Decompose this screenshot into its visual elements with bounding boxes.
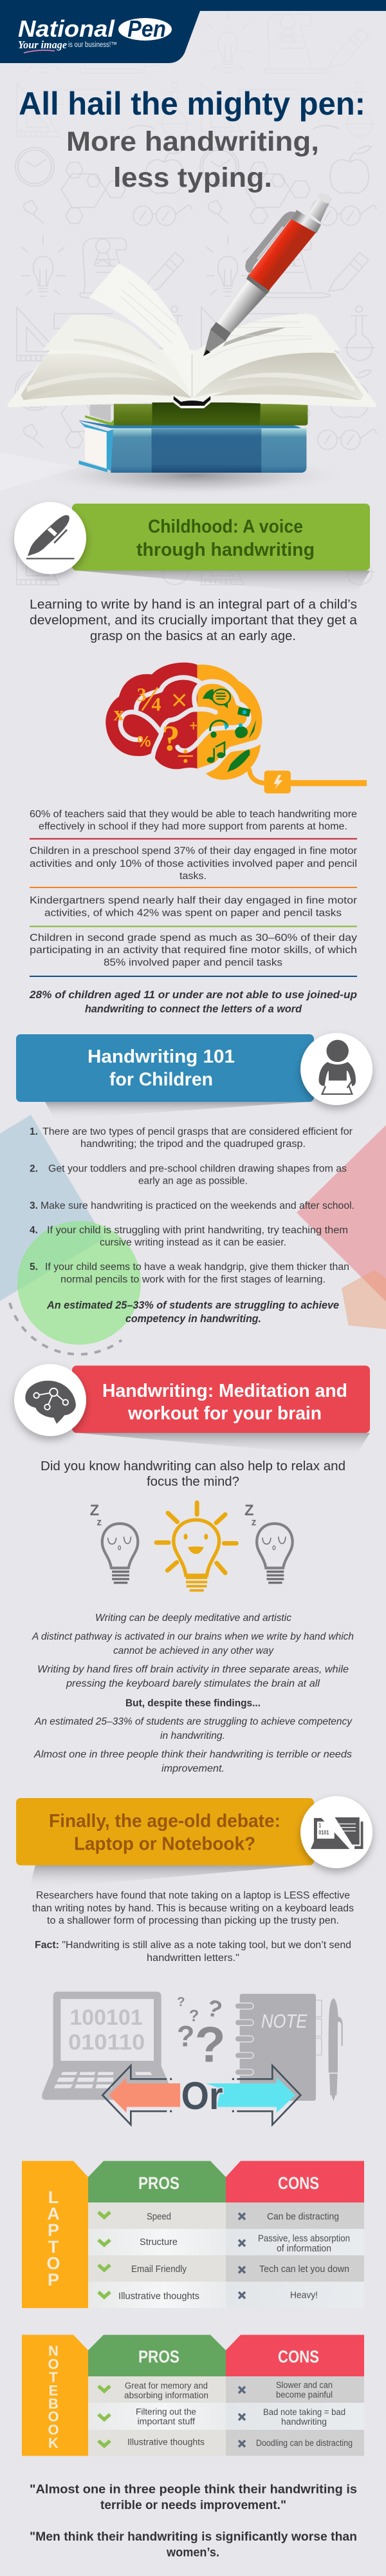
icon: sleeping bulb left — [90, 1502, 138, 1583]
meditation facts: cannot be achieved in any other way — [113, 1645, 274, 1656]
blue header bar — [16, 1034, 314, 1102]
green header bar — [72, 504, 370, 571]
icon: sleeping bulb right: Z — [244, 1502, 254, 1519]
meditation facts: An estimated 25–33% of students are struggling to achieve competency — [34, 1716, 353, 1727]
icon: sleeping bulb right: z — [252, 1517, 257, 1528]
tip 1: 1. — [30, 1126, 38, 1137]
estimate callout: An estimated 25–33% of students are struggling to achieve — [46, 1299, 339, 1311]
stat: second grade: Children in second grade spend as much as 30–60% of their day — [30, 933, 357, 943]
laptop label: P — [48, 2270, 59, 2289]
table rows: of information — [277, 2244, 331, 2254]
stat: second grade — [30, 933, 357, 969]
table rows: Speed — [147, 2211, 171, 2222]
cons header — [226, 2161, 364, 2202]
notebook label: O — [48, 2421, 59, 2438]
pros header — [88, 2335, 226, 2376]
tip 2: Get your toddlers and pre-school children drawing shapes from as — [48, 1163, 347, 1175]
meditation facts: Almost one in three people think their handwriting is terrible or needs — [33, 1749, 352, 1760]
tip 3: Make sure handwriting is practiced on the weekends and after school. — [41, 1200, 354, 1211]
meditation facts: Writing can be deeply meditative and artistic — [95, 1613, 291, 1624]
stat: kindergartners: Kindergartners spend nearly half their day engaged in fine motor — [30, 895, 357, 906]
laptop label — [22, 2161, 88, 2308]
icon: child writing — [300, 1033, 372, 1105]
illustration: pen — [203, 191, 333, 356]
pen — [329, 1998, 343, 2101]
heading: Childhood: A voice — [148, 516, 303, 537]
title: less typing. — [113, 162, 272, 193]
stat: kindergartners — [30, 895, 357, 918]
title — [19, 86, 365, 193]
panel: Handwriting 101 — [16, 1033, 372, 1119]
notebook: NOTE — [261, 2011, 308, 2032]
notebook label: K — [48, 2435, 59, 2451]
tip 2 — [30, 1163, 347, 1186]
cons header — [226, 2335, 364, 2376]
illustration: light bulbs — [90, 1502, 293, 1591]
tip 2: early an age as possible. — [138, 1176, 248, 1186]
closing quotes: "Men think their handwriting is significantly worse than — [30, 2530, 357, 2544]
heading: workout for your brain — [127, 1403, 322, 1424]
heading — [49, 1811, 280, 1855]
notebook label: B — [48, 2396, 59, 2412]
math symbols: x — [114, 702, 124, 725]
header shadow — [77, 1433, 370, 1457]
table rows: Passive, less absorption — [258, 2233, 350, 2244]
stat: joined-up: handwriting to connect the letters of a word — [85, 1003, 302, 1015]
illustration: brain with plug — [106, 663, 367, 793]
laptop label: L — [48, 2188, 59, 2207]
table rows: Email Friendly — [131, 2264, 187, 2275]
closing quotes: "Almost one in three people think their handwriting is — [30, 2482, 357, 2496]
title: More handwriting, — [66, 126, 319, 157]
pros header — [88, 2161, 226, 2202]
panel: Meditation — [14, 1364, 370, 1457]
notebook label: N — [48, 2343, 59, 2359]
meditation intro: focus the mind? — [147, 1475, 239, 1489]
tip 1: There are two types of pencil grasps that are considered efficient for — [42, 1126, 353, 1137]
light wedge left of book — [0, 452, 78, 491]
icon: sleeping bulb right — [244, 1502, 293, 1583]
icon: sleeping bulb left: Z — [90, 1502, 99, 1519]
notebook label: O — [48, 2409, 59, 2425]
notebook — [235, 1994, 322, 2101]
laptop — [42, 1992, 176, 2100]
logo: National Pen: Your image — [18, 39, 67, 51]
stat: kindergartners: activities, of which 42% was spent on paper and pencil tasks — [44, 908, 342, 918]
table rows: Slower and can — [276, 2380, 333, 2390]
table: notebook pros and cons — [22, 2335, 364, 2456]
cons header: CONS — [278, 2347, 319, 2366]
brain right half — [198, 665, 262, 768]
laptop label: T — [48, 2237, 59, 2257]
closing quotes — [30, 2482, 357, 2559]
stat: preschool — [30, 846, 357, 882]
question marks: ? — [177, 2020, 194, 2052]
tip 4: 4. — [30, 1225, 38, 1236]
pros header: PROS — [138, 2174, 179, 2193]
stat: joined-up — [29, 989, 357, 1015]
green book — [85, 402, 308, 426]
tip 4: If your child is struggling with print handwriting, try teaching them — [47, 1225, 348, 1236]
heading — [87, 1046, 235, 1090]
notebook label: T — [49, 2369, 58, 2385]
tip 4 — [30, 1225, 348, 1248]
table rows: Illustrative thoughts — [127, 2437, 205, 2447]
icon: laptop and notebook — [300, 1796, 372, 1868]
logo: National Pen: Pen — [127, 15, 166, 42]
intro text: development, and its crucially important that they get a — [30, 613, 358, 627]
math symbols: ? — [162, 719, 180, 759]
icon: sleeping bulb left: z — [96, 1517, 102, 1528]
meditation facts: in handwriting. — [160, 1730, 225, 1741]
table rows: Doodling can be distracting — [256, 2438, 353, 2448]
stat: joined-up: 28% of children aged 11 or under are not able to use joined-up — [29, 989, 357, 1001]
illustration: laptop vs notebook — [42, 1992, 343, 2125]
math symbols — [114, 684, 197, 763]
math symbols: 4 — [151, 694, 161, 715]
icon: brain network — [14, 1364, 86, 1436]
header shadow — [45, 1102, 309, 1119]
table rows: Structure — [140, 2237, 178, 2248]
debate text: Fact: "Handwriting is still alive as a note taking tool, but we don’t send — [35, 1940, 351, 1951]
decorative shapes behind list — [0, 1115, 386, 1354]
notebook label — [22, 2335, 88, 2456]
icon: laptop and notebook: 0101 — [318, 1830, 329, 1836]
table rows — [88, 2202, 364, 2308]
tip 5: normal pencils to work with for the first stages of learning. — [60, 1274, 326, 1285]
meditation facts — [32, 1613, 354, 1774]
meditation facts: But, despite these findings... — [125, 1698, 261, 1709]
stat: preschool: Children in a preschool spend 37% of their day engaged in fine motor — [30, 846, 357, 857]
brain left half — [106, 663, 198, 769]
laptop label: P — [48, 2221, 59, 2240]
meditation intro — [41, 1459, 345, 1489]
laptop: 010110 — [68, 2031, 145, 2055]
title: All hail the mighty pen: — [19, 86, 365, 122]
table rows: Illustrative thoughts — [118, 2291, 199, 2302]
debate text: handwritten letters." — [147, 1953, 239, 1964]
laptop: 100101 — [69, 2005, 143, 2030]
blue book — [78, 421, 306, 473]
open book — [7, 263, 376, 408]
logo: National Pen: National — [18, 15, 115, 42]
tip 1: handwriting; the tripod and the quadruped grasp. — [80, 1139, 306, 1150]
tip 2: 2. — [30, 1163, 38, 1175]
table: laptop pros and cons — [22, 2161, 364, 2308]
debate text: to a shallower form of processing than picking up the trusty pen. — [47, 1915, 339, 1926]
tip 3: 3. — [30, 1200, 38, 1211]
heading — [102, 1381, 347, 1424]
meditation facts: pressing the keyboard barely stimulates the brain at all — [66, 1678, 320, 1689]
table rows: Bad note taking = bad — [263, 2407, 345, 2417]
header shadow — [29, 1865, 309, 1889]
background doodle pattern — [15, 0, 376, 585]
meditation facts: improvement. — [161, 1763, 225, 1774]
debate text: than writing notes by hand. This is because writing on a keyboard leads — [32, 1903, 354, 1914]
debate text: Researchers have found that note taking on a laptop is LESS effective — [36, 1890, 350, 1901]
book floor shadow — [39, 455, 347, 496]
stat: second grade: 85% involved paper and pencil tasks — [104, 957, 282, 969]
intro text — [30, 598, 358, 643]
arrow: right cyan — [206, 2065, 300, 2125]
heading: Handwriting: Meditation and — [102, 1381, 347, 1401]
logo: National Pen — [18, 15, 172, 53]
question marks: ? — [195, 2016, 226, 2073]
question marks: ? — [189, 2007, 199, 2025]
tip 5: If your child seems to have a weak handgrip, give them thicker than — [45, 1262, 349, 1273]
tip 1 — [30, 1126, 353, 1150]
stat: second grade: participating in an activity that required fine motor skills, of which — [30, 945, 357, 956]
header shadow — [77, 571, 370, 596]
brain lower lobe — [205, 741, 261, 780]
heading — [136, 516, 315, 560]
question marks: ? — [204, 1994, 225, 2023]
doodle cut-off below hero — [0, 452, 386, 510]
red header bar — [72, 1365, 370, 1433]
stats list — [29, 809, 357, 1015]
icon: pen circle — [14, 502, 86, 574]
closing quotes: terrible or needs improvement." — [100, 2498, 286, 2512]
math symbols: 3 — [137, 684, 147, 705]
notebook label: O — [48, 2356, 59, 2372]
math symbols: % — [137, 733, 151, 750]
meditation facts: Writing by hand fires off brain activity in three separate areas, while — [37, 1664, 349, 1675]
table rows: absorbing information — [124, 2391, 208, 2400]
heading: for Children — [109, 1069, 213, 1090]
icon: laptop and notebook: 1 — [318, 1823, 322, 1829]
table rows: Filtering out the — [136, 2407, 196, 2416]
table rows: important stuff — [138, 2416, 195, 2427]
arrow: left orange — [102, 2065, 180, 2125]
icon: bright bulb — [156, 1502, 236, 1591]
stat: teachers — [30, 809, 357, 832]
tip 5 — [30, 1262, 349, 1285]
estimate callout — [46, 1299, 339, 1325]
plug and cable — [249, 768, 367, 793]
numbered tips — [30, 1126, 354, 1325]
table rows: handwriting — [281, 2417, 327, 2427]
intro text: grasp on the basics at an early age. — [90, 629, 296, 643]
question marks: ? — [177, 1994, 185, 2009]
notebook label: E — [49, 2383, 58, 2398]
heading: Laptop or Notebook? — [74, 1834, 255, 1855]
closing quotes: women’s. — [166, 2545, 219, 2559]
meditation intro: Did you know handwriting can also help to relax and — [41, 1459, 345, 1473]
header band with logo — [0, 0, 386, 63]
logo: National Pen: is our business!™ — [68, 41, 117, 49]
question marks — [177, 1994, 226, 2073]
heading: Handwriting 101 — [87, 1046, 235, 1067]
intro text: Learning to write by hand is an integral part of a child’s — [30, 598, 357, 612]
tip 5: 5. — [30, 1262, 38, 1273]
stat: preschool: tasks. — [179, 871, 207, 882]
pros header: PROS — [138, 2347, 179, 2366]
estimate callout: competency in handwriting. — [125, 1312, 261, 1325]
panel: Childhood — [14, 502, 370, 596]
meditation facts: A distinct pathway is activated in our brains when we write by hand which — [32, 1631, 354, 1642]
heading: Finally, the age-old debate: — [49, 1811, 280, 1832]
table rows — [88, 2376, 364, 2456]
heading: through handwriting — [136, 540, 315, 560]
Or label: Or — [181, 2074, 223, 2117]
table rows: Can be distracting — [267, 2211, 339, 2222]
brain folds — [120, 677, 263, 772]
table rows: become painful — [276, 2390, 333, 2400]
table rows: Heavy! — [290, 2290, 318, 2300]
stat: preschool: activities and only 10% of those activities involved paper and pencil — [30, 858, 357, 869]
table rows: Tech can let you down — [259, 2264, 349, 2275]
creative icons — [203, 689, 256, 772]
tip 4: cursive writing instead as it can be easier. — [100, 1237, 286, 1248]
cons header: CONS — [278, 2174, 319, 2193]
illustration: book stack — [7, 263, 376, 473]
panel: Laptop or Notebook — [16, 1796, 372, 1889]
stat: teachers: 60% of teachers said that they would be able to teach handwriting more — [30, 809, 357, 820]
yellow header bar — [16, 1798, 314, 1865]
laptop label: O — [46, 2254, 60, 2273]
stat: teachers: effectively in school if they had more support from parents at home. — [39, 821, 347, 832]
laptop label: A — [47, 2204, 60, 2223]
debate text — [32, 1890, 354, 1964]
table rows: Great for memory and — [125, 2381, 208, 2391]
